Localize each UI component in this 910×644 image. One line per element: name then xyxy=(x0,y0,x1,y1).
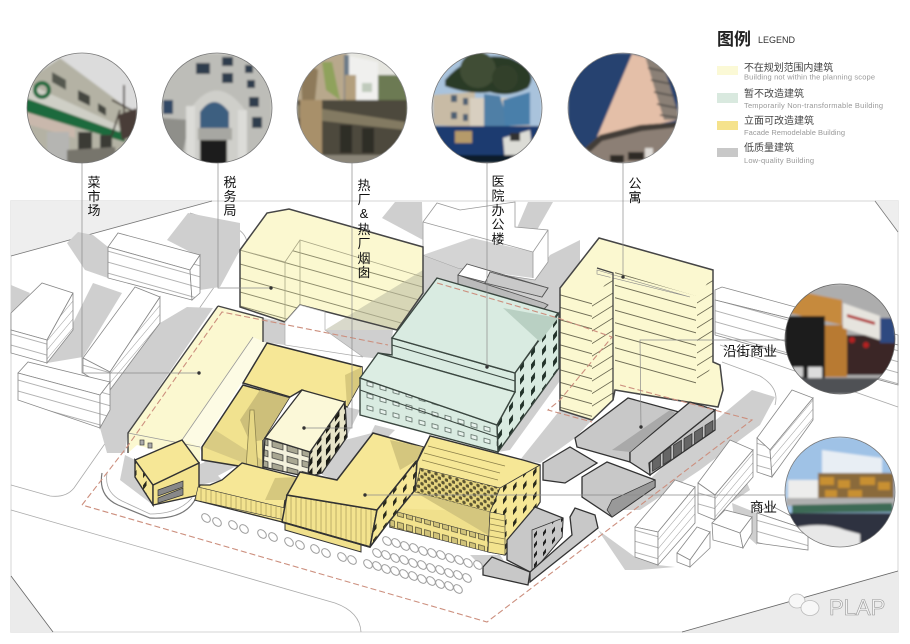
building: central L-shaped block xyxy=(282,433,423,552)
grey block: long warehouse xyxy=(575,398,715,475)
legend item: temporarily non-transformable xyxy=(717,87,883,110)
site plan map xyxy=(11,201,898,632)
legend item: facade remodelable: Facade Remodelable Building xyxy=(744,128,845,137)
icon: wechat bubbles xyxy=(789,594,819,616)
white neighbouring apartment blocks xyxy=(11,233,898,567)
label: heat plant and chimney: 热 xyxy=(357,178,371,193)
label: heat plant and chimney: 厂 xyxy=(357,192,371,207)
legend xyxy=(717,30,883,165)
legend item: outside planning scope: Building not within the planning scope xyxy=(744,72,875,82)
label: hospital office: 办 xyxy=(491,203,505,218)
buildings: grey low-quality group xyxy=(483,398,715,585)
red dashed planning boundary xyxy=(82,283,752,622)
legend item: outside planning scope: 不在规划范围内建筑 xyxy=(744,61,833,74)
legend item: low quality: 低质量建筑 xyxy=(744,141,794,154)
watermark: PLAP: PLAP xyxy=(829,595,885,620)
label: street-side commerce: 沿街商业 xyxy=(723,344,777,359)
label: tax bureau: 务 xyxy=(223,189,237,204)
building: tax bureau, not in planning scope xyxy=(240,209,423,330)
legend item: temporarily non-transformable: 暂不改造建筑 xyxy=(744,87,804,100)
label: apartment: 寓 xyxy=(628,190,642,205)
label: tax bureau: 局 xyxy=(223,203,237,218)
watermark: PLAP xyxy=(789,594,885,620)
ground wedges and road edges xyxy=(11,201,898,632)
legend heading: 图例 xyxy=(717,30,751,49)
small rooftop block behind hospital xyxy=(458,264,548,310)
label: tax bureau: 税 xyxy=(223,175,237,190)
icon: chimney xyxy=(246,410,258,470)
grey block: middle shed xyxy=(582,462,655,517)
legend item: facade remodelable xyxy=(717,114,845,137)
white ground court between buildings xyxy=(285,305,363,357)
building: upper facade-remodelable block xyxy=(243,343,362,407)
label: vegetable market: 场 xyxy=(87,203,101,218)
legend item: low quality: Low-quality Building xyxy=(744,156,814,165)
label: heat plant and chimney: 热 xyxy=(357,222,371,237)
grey block: front low shed xyxy=(483,557,530,585)
label: heat plant and chimney: & xyxy=(360,206,369,221)
legend item: facade remodelable: 立面可改造建筑 xyxy=(744,114,814,127)
label: heat plant and chimney: 烟 xyxy=(357,251,371,266)
photo: heat plant and chimney xyxy=(297,53,408,165)
label: hospital office: 楼 xyxy=(491,232,505,246)
white building behind hospital xyxy=(423,202,548,280)
lattice facade xyxy=(415,468,500,512)
building: tall apartment xyxy=(560,238,723,420)
parking cars xyxy=(200,512,484,595)
building: green hospital office xyxy=(360,278,559,452)
building: heat plant with chimney xyxy=(202,385,289,470)
label: apartment: 公 xyxy=(628,176,642,191)
photo: tax bureau xyxy=(162,53,272,165)
legend item: low quality xyxy=(717,141,814,165)
photo: apartment tower xyxy=(568,53,680,163)
building: white-roofed facade block xyxy=(263,390,347,477)
label: commerce: 商业 xyxy=(750,500,777,515)
label: vegetable market: 菜 xyxy=(87,175,101,190)
label: heat plant and chimney: 囱 xyxy=(357,265,371,280)
photo: street-side shops xyxy=(785,284,897,394)
photo: vegetable market xyxy=(20,53,137,165)
leader lines and markers xyxy=(82,163,788,497)
label: hospital office: 公 xyxy=(491,217,505,232)
map frame xyxy=(11,201,898,632)
label: hospital office: 医 xyxy=(491,174,505,189)
grey block: front tower xyxy=(507,507,563,573)
legend heading: LEGEND xyxy=(758,35,796,45)
label: hospital office: 院 xyxy=(491,188,505,204)
grey block: rear shed xyxy=(543,447,597,483)
label: heat plant and chimney: 厂 xyxy=(357,236,371,251)
legend item: outside planning scope xyxy=(717,61,875,82)
cast shadows on ground xyxy=(11,202,775,570)
building: front-left low block xyxy=(195,463,297,522)
building: long block, not in planning scope xyxy=(128,306,267,463)
label: vegetable market: 市 xyxy=(87,189,101,204)
building: small corner block xyxy=(135,440,199,505)
legend item: temporarily non-transformable: Temporarily Non-transformable Building xyxy=(744,101,883,110)
building: facade-remodelable lattice block xyxy=(390,436,540,555)
legend heading xyxy=(717,30,796,49)
grey block: strip xyxy=(530,508,598,582)
photo: commercial building xyxy=(785,437,896,547)
photo: hospital office xyxy=(432,52,542,163)
